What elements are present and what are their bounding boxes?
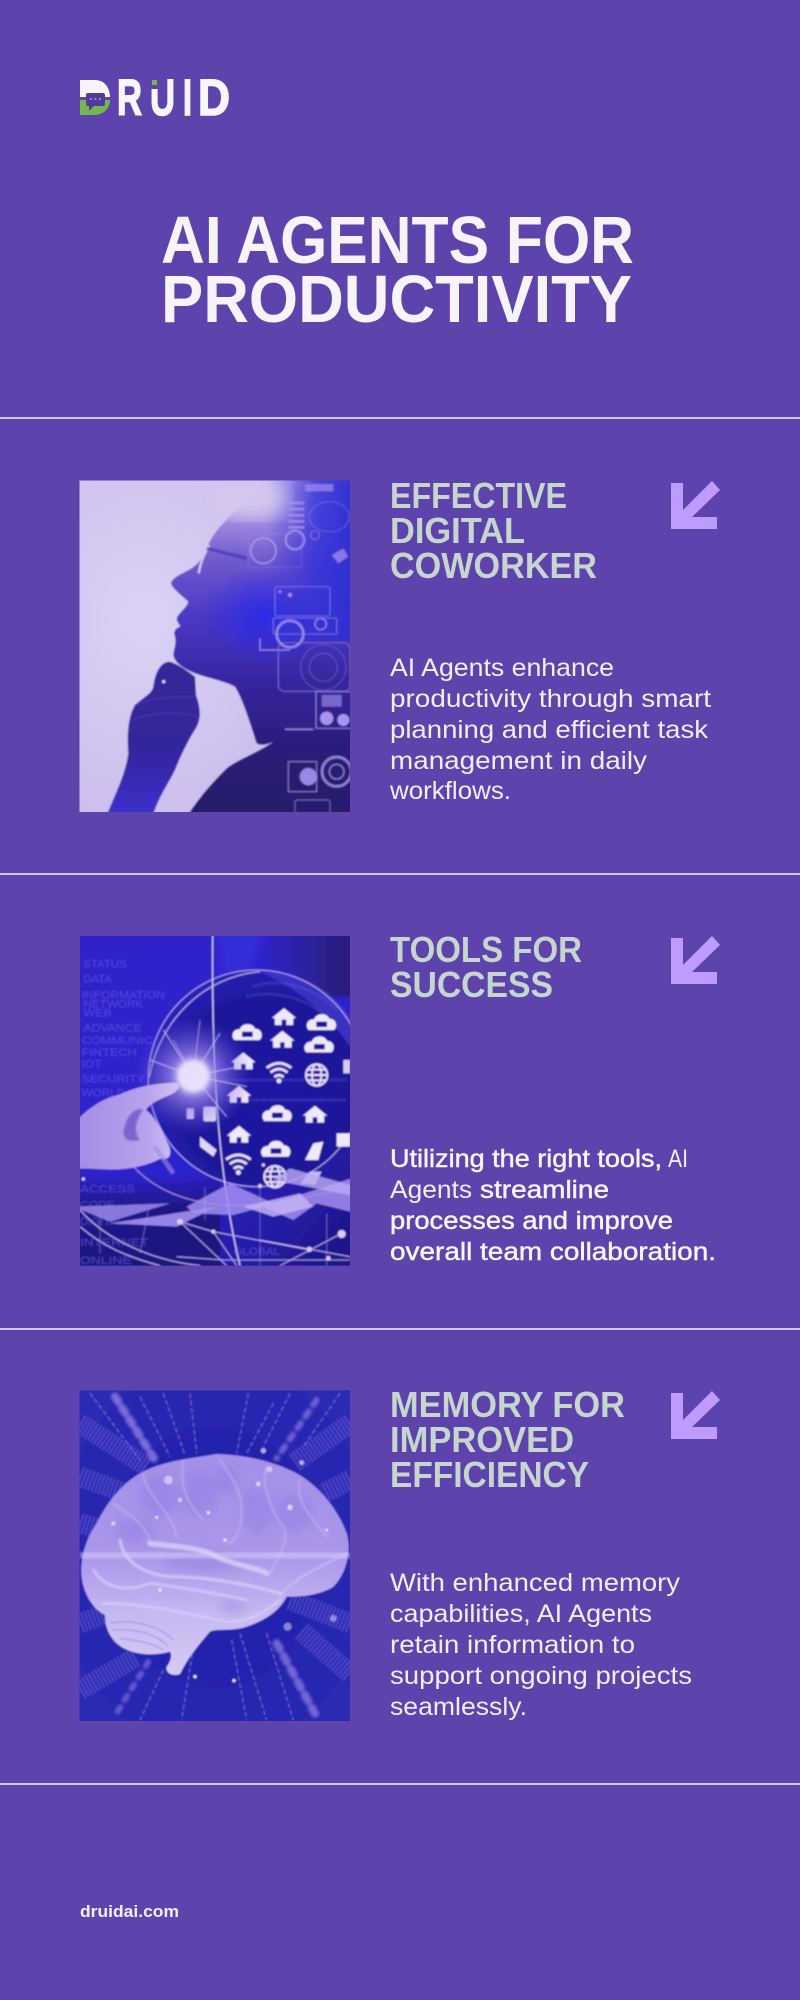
- ghost words: CODE: [80, 1200, 115, 1212]
- ghost words: [80, 958, 280, 1267]
- heading: EFFICIENCY: [390, 1454, 589, 1495]
- logo: DRUID: R: [117, 69, 142, 126]
- ghost words: GLOBAL: [233, 1246, 280, 1258]
- heading: [390, 475, 597, 586]
- ghost words: INFORMATION: [82, 990, 165, 1002]
- heading: [390, 1384, 625, 1495]
- footer url: druidai.com: [80, 1902, 179, 1921]
- ghost words: DIGITAL: [80, 1216, 123, 1228]
- logo: DRUID: [80, 69, 230, 126]
- image: glowing brain with data streams: [73, 1385, 357, 1728]
- body text: [390, 1569, 692, 1721]
- data streams: [80, 1393, 350, 1720]
- logo: DRUID: D: [198, 69, 230, 126]
- glow blobs: [113, 1397, 317, 1718]
- body text: capabilities, AI Agents: [390, 1600, 652, 1628]
- brain: [81, 1454, 349, 1675]
- ghost words: ONLINE: [80, 1255, 132, 1267]
- heading: IMPROVED: [390, 1419, 574, 1460]
- heading: EFFECTIVE: [390, 475, 567, 516]
- ghost words: NETWORK: [83, 999, 144, 1011]
- ghost words: FINTECH: [82, 1047, 137, 1059]
- hand: [73, 1083, 179, 1170]
- body text: seamlessly.: [390, 1693, 527, 1721]
- image: profile silhouette with HUD graphics: [73, 473, 357, 820]
- globe: [148, 970, 365, 1187]
- ghost words: DATA: [83, 973, 112, 985]
- panel: effective digital coworker: [73, 473, 720, 820]
- logo: DRUID: U: [150, 69, 175, 126]
- icon: arrow: [671, 481, 720, 529]
- ghost words: STATUS: [83, 958, 127, 970]
- body text: Agents: [390, 1176, 472, 1204]
- body text: Utilizing the right tools,: [390, 1145, 662, 1173]
- body text: With enhanced memory: [390, 1569, 681, 1597]
- logo: DRUID: I: [183, 69, 192, 126]
- body text: streamline: [480, 1176, 609, 1204]
- body text: management in daily: [390, 747, 648, 775]
- horizontal scan line: [80, 1552, 350, 1558]
- body text: AI Agents enhance: [390, 654, 614, 682]
- ghost words: SECURITY: [82, 1074, 146, 1086]
- body text: support ongoing projects: [390, 1662, 692, 1690]
- sparkle dots: [111, 1448, 337, 1682]
- heading: TOOLS FOR: [390, 929, 582, 970]
- icons: [187, 1008, 350, 1187]
- body text: [390, 1145, 716, 1266]
- glasses: [199, 545, 209, 573]
- lower triangles: [73, 1168, 357, 1227]
- body text: overall team collaboration.: [390, 1238, 716, 1266]
- ghost words: IOT: [82, 1059, 102, 1071]
- body text: planning and efficient task: [390, 716, 709, 744]
- body text: AI: [668, 1145, 688, 1173]
- body text: retain information to: [390, 1631, 635, 1659]
- image: hand touching digital globe: [80, 936, 350, 1266]
- ghost words: COMMUNIC: [82, 1035, 153, 1047]
- title: PRODUCTIVITY: [161, 262, 632, 337]
- ghost words: WORLD: [82, 1088, 125, 1100]
- body text: productivity through smart: [390, 685, 711, 713]
- panel: memory for improved efficiency: [73, 1384, 720, 1728]
- ghost words: ADVANCE: [83, 1023, 142, 1035]
- title: AI AGENTS FOR: [161, 203, 634, 278]
- icon: arrow: [671, 936, 720, 984]
- panel: tools for success: [73, 929, 720, 1273]
- body text: [389, 654, 711, 805]
- ghost words: WEB: [83, 1008, 112, 1020]
- heading: MEMORY FOR: [390, 1384, 625, 1425]
- body text: processes and improve: [390, 1207, 673, 1235]
- icon: arrow: [671, 1391, 720, 1439]
- title: [161, 203, 634, 337]
- ghost words: ACCESS: [80, 1184, 135, 1196]
- body text: workflows.: [389, 777, 511, 805]
- flare: [140, 1021, 248, 1130]
- heading: COWORKER: [390, 545, 597, 586]
- heading: [390, 929, 582, 1005]
- heading: DIGITAL: [390, 510, 525, 551]
- ghost words: INTERNET: [80, 1237, 149, 1249]
- heading: SUCCESS: [390, 964, 553, 1005]
